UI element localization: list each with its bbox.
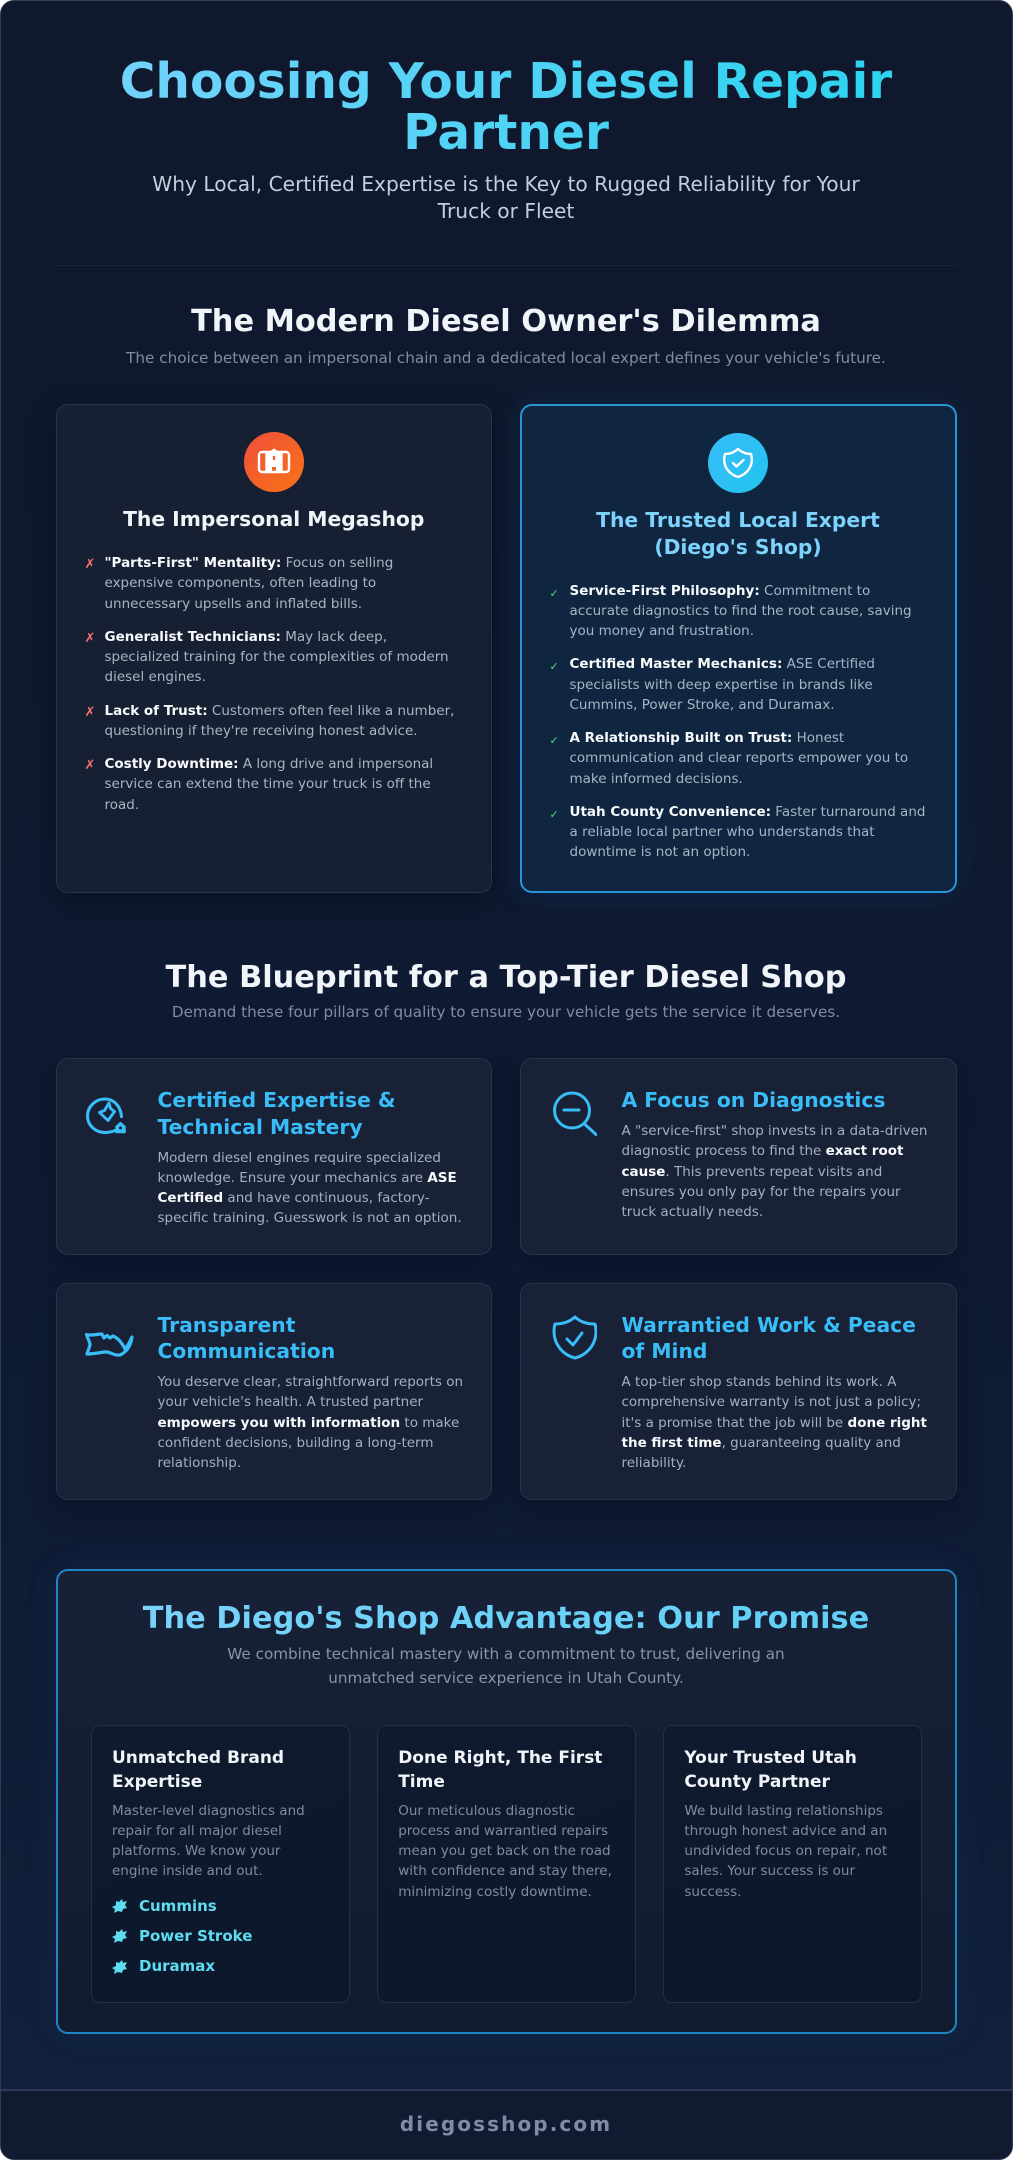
list: local expert benefits: downtime is not an option. [570,844,750,860]
pillar text: You deserve clear, straightforward reports on [158,1374,463,1390]
title: Partner [403,104,609,160]
sub-card heading: Your Trusted Utah [684,1748,857,1768]
panel: trusted local expert [520,404,956,892]
subtitle: Why Local, Certified Expertise is the Key to Rugged Reliability for Your [152,172,860,196]
list: local expert benefits: Certified Master Mechanics: ASE Certified [570,656,875,672]
footer [0,2088,1012,2160]
list: megashop drawbacks: questioning if they're receiving honest advice. [104,723,418,739]
icon: shield check [552,1315,597,1360]
sub-card heading: County Partner [684,1772,830,1792]
pillar heading [158,1088,396,1139]
list: local expert benefits: ✓ [550,808,559,821]
pillar heading [622,1312,916,1363]
brand name: Cummins [139,1896,217,1914]
list: local expert benefits: Utah County Convenience: Faster turnaround and [570,804,925,820]
section intro: dilemma: The choice between an impersonal chain and a dedicated local expert defines your vehicle's future. [126,348,886,366]
sub-card text: success. [684,1884,742,1900]
pillar heading: Certified Expertise & [158,1088,396,1112]
pillar text: comprehensive warranty is not just a policy; [622,1394,921,1410]
sub-card text: Master-level diagnostics and [112,1802,305,1818]
pillar text: the first time, guaranteeing quality and [622,1435,901,1451]
pillar text: reliability. [622,1455,686,1471]
sub-card heading: Expertise [112,1772,202,1792]
pillar text: ensures you only pay for the repairs your [622,1184,901,1200]
sub-card text: process and warrantied repairs [398,1823,608,1839]
list: local expert benefits: Service-First Philosophy: Commitment to [570,582,870,598]
list: local expert benefits: ✓ [550,660,559,673]
sub-card: done right [377,1724,636,2002]
list: megashop drawbacks: "Parts-First" Mentality: Focus on selling [104,555,393,571]
sub-card text: mean you get back on the road [398,1843,611,1859]
list: local expert benefits: ✓ [550,734,559,747]
sub-card heading: Done Right, The First [398,1748,602,1768]
sub-card heading: Unmatched Brand [112,1748,284,1768]
list: megashop drawbacks: ✗ [84,631,95,646]
brand name: Duramax [139,1957,215,1975]
pillar heading: A Focus on Diagnostics [622,1088,885,1112]
brand name: Power Stroke [139,1926,252,1944]
pillar text: diagnostic process to find the exact root [622,1143,903,1159]
icon: brand burst [112,1960,127,1974]
pillar text [622,1123,927,1220]
pillar heading: of Mind [622,1339,707,1363]
icon: gauge with lock [86,1098,126,1134]
panel: diego's shop advantage [56,1569,956,2034]
panel: transparent communication [56,1282,492,1500]
list: local expert benefits: ✓ [550,586,559,600]
panel heading: The Diego's Shop Advantage: Our Promise [143,1600,869,1636]
title: Choosing Your Diesel Repair [120,54,892,110]
pillar text: cause. This prevents repeat visits and [622,1164,882,1180]
pillar text: Certified and have continuous, factory- [158,1190,430,1206]
pillar text: specific training. Guesswork is not an option. [158,1210,462,1226]
pillar text [622,1374,927,1471]
sub-card text: undivided focus on repair, not [684,1843,887,1859]
pillar heading: Warrantied Work & Peace [622,1312,916,1336]
card heading: local expert: (Diego's Shop) [654,535,822,559]
pillar text: Modern diesel engines require specialized [158,1150,441,1166]
list: megashop drawbacks: unnecessary upsells and inflated bills. [104,596,362,612]
list: megashop drawbacks: Generalist Technicians: May lack deep, [104,629,387,645]
list: megashop drawbacks: specialized training for the complexities of modern [104,649,449,665]
list: local expert benefits: a reliable local partner who understands that [570,824,875,840]
heading: dilemma: The Modern Diesel Owner's Dilemma [191,304,821,339]
panel intro: We combine technical mastery with a commitment to trust, delivering an [227,1645,785,1663]
sub-card text: Our meticulous diagnostic [398,1802,575,1818]
sub-card text: platforms. We know your [112,1843,280,1859]
pillar text: confident decisions, building a long-term [158,1435,434,1451]
icon: magnifier [553,1092,597,1136]
list: megashop drawbacks: expensive components, often leading to [104,575,376,591]
list: local expert benefits: A Relationship Built on Trust: Honest [570,730,844,746]
heading: blueprint: The Blueprint for a Top-Tier Diesel Shop [166,960,846,994]
list: local expert benefits: Cummins, Power Stroke, and Duramax. [570,697,835,713]
list: megashop drawbacks [84,555,454,812]
pillar text: empowers you with information to make [158,1414,459,1430]
list: megashop drawbacks: road. [104,796,139,812]
list: megashop drawbacks: Costly Downtime: A long drive and impersonal [104,756,433,772]
list: megashop drawbacks: service can extend the time your truck is off the [104,776,431,792]
sub-card text [398,1802,612,1900]
sub-card text [684,1802,887,1900]
subtitle [152,172,860,222]
card heading: local expert [596,508,880,559]
pillar heading [158,1312,335,1363]
pillar heading: Technical Mastery [158,1115,363,1139]
sub-card: trusted partner [663,1724,922,2002]
pillar text: A "service-first" shop invests in a data-driven [622,1123,927,1139]
list: local expert benefits: you money and frustration. [570,623,754,639]
icon: brand burst [112,1929,127,1943]
pillar text [158,1374,463,1471]
list: megashop drawbacks: ✗ [84,557,95,572]
pillar text [158,1150,462,1226]
title [0,56,1012,158]
sub-card heading: Time [398,1772,445,1792]
list: megashop drawbacks: ✗ [84,758,95,773]
pillar text: your vehicle's health. A trusted partner [158,1394,423,1410]
pillar heading: Transparent [158,1312,295,1336]
icon: shield check badge [708,432,768,492]
footer url: diegosshop.com [400,2112,612,2136]
sub-card text: sales. Your success is our [684,1863,855,1879]
list: local expert benefits: communication and clear reports empower you to [570,750,908,766]
pillar text: it's a promise that the job will be done right [622,1414,927,1430]
card heading: megashop: The Impersonal Megashop [123,507,424,531]
section intro: blueprint: Demand these four pillars of quality to ensure your vehicle gets the service it deserves. [172,1002,840,1020]
list: megashop drawbacks: Lack of Trust: Customers often feel like a number, [104,702,454,718]
icon: communication outline [85,1332,134,1357]
pillar text: relationship. [158,1455,241,1471]
pillar text: A top-tier shop stands behind its work. A [622,1374,896,1390]
icon: megashop [244,432,304,492]
panel: diagnostics [520,1058,956,1255]
panel: warrantied work [520,1282,956,1500]
sub-card: brand expertise [91,1724,350,2002]
panel: certified expertise [56,1058,492,1255]
brand list [112,1896,252,1975]
sub-card text: minimizing costly downtime. [398,1884,592,1900]
list: megashop drawbacks: diesel engines. [104,669,206,685]
list: local expert benefits: make informed decisions. [570,770,743,786]
sub-card heading [684,1748,857,1792]
list: megashop drawbacks: ✗ [84,704,95,720]
list: local expert benefits: specialists with deep expertise in brands like [570,676,873,692]
list: local expert benefits: accurate diagnostics to find the root cause, saving [570,603,912,619]
pillar text: truck actually needs. [622,1204,763,1220]
pillar heading: Communication [158,1339,335,1363]
icon: brand burst [112,1899,127,1913]
card heading: local expert: The Trusted Local Expert [596,508,880,532]
sub-card text [112,1802,305,1879]
sub-card heading [398,1748,602,1792]
sub-card text: through honest advice and an [684,1823,887,1839]
sub-card text: with confidence and stay there, [398,1863,612,1879]
sub-card text: repair for all major diesel [112,1823,282,1839]
sub-card heading [112,1748,284,1792]
sub-card text: engine inside and out. [112,1863,263,1879]
pillar text: knowledge. Ensure your mechanics are ASE [158,1170,457,1186]
panel intro [227,1645,785,1686]
list: local expert benefits [550,582,925,860]
sub-card text: We build lasting relationships [684,1802,883,1818]
subtitle: Truck or Fleet [438,198,574,222]
panel intro: unmatched service experience in Utah County. [328,1668,684,1686]
panel: impersonal megashop [56,404,492,892]
